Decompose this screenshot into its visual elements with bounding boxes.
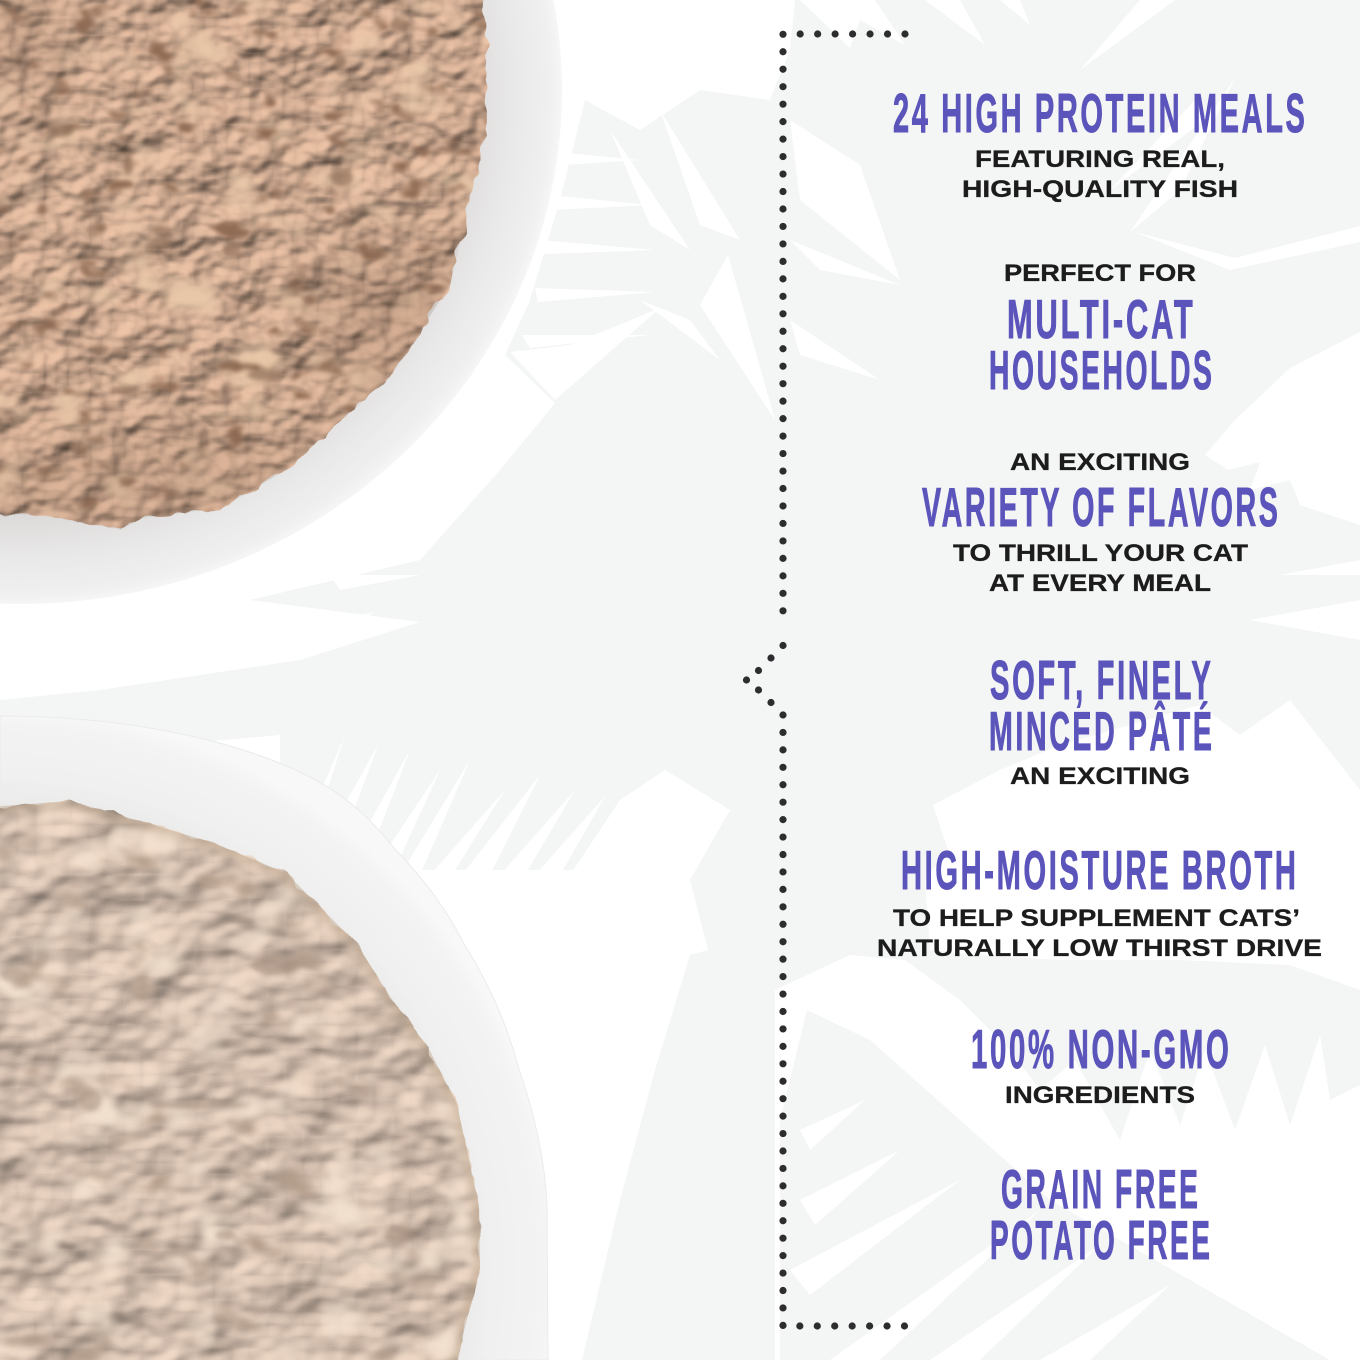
bottom plate <box>0 716 548 1360</box>
subtext: AN EXCITING <box>1010 763 1190 790</box>
white streaks in lower frond <box>800 1100 865 1150</box>
dotted line lower vertical and bottom <box>783 715 906 1326</box>
feature: variety of flavors <box>922 449 1280 597</box>
white gap right side <box>1205 332 1360 525</box>
background white frond gaps and streaks <box>285 0 1360 1360</box>
feature: multi-cat households <box>989 260 1214 401</box>
food: top bowl pate <box>0 0 500 530</box>
plate rim top <box>0 0 562 604</box>
subtext line 2: NATURALLY LOW THIRST DRIVE <box>877 935 1322 962</box>
notch pointing left <box>743 642 787 706</box>
white feather streaks upper left frond <box>555 152 640 165</box>
white feather streaks above bottom plate <box>285 735 345 875</box>
feature: grain free potato free <box>990 1158 1212 1271</box>
white gap behind broth text <box>925 700 1360 990</box>
white feather streaks under top plate <box>300 612 375 650</box>
feature: high-moisture broth <box>877 839 1322 962</box>
dotted bracket <box>743 34 906 1326</box>
dotted line top and upper vertical <box>783 34 905 628</box>
subtext line 2: HIGH-QUALITY FISH <box>962 176 1238 203</box>
heading line 1: MULTI-CAT <box>1007 288 1196 350</box>
white streak rays <box>1135 226 1360 270</box>
plate rim bottom <box>0 716 548 1360</box>
food: bottom bowl pate <box>0 801 480 1360</box>
subtext line 1: FEATURING REAL, <box>975 146 1225 173</box>
lead-in: AN EXCITING <box>1010 449 1190 476</box>
feature: 24 high protein meals <box>893 82 1308 203</box>
lead-in: PERFECT FOR <box>1004 260 1196 287</box>
lower frond <box>780 1010 1330 1360</box>
subtext line 1: TO HELP SUPPLEMENT CATS’ <box>893 905 1300 932</box>
subtext line 1: TO THRILL YOUR CAT <box>953 540 1248 567</box>
subtext line 2: AT EVERY MEAL <box>989 570 1211 597</box>
top plate <box>0 0 562 604</box>
feature: soft finely minced pate <box>989 649 1214 790</box>
feature: non-gmo <box>971 1018 1232 1109</box>
lower right frond tips <box>1200 700 1360 800</box>
subtext: INGREDIENTS <box>1005 1082 1195 1109</box>
